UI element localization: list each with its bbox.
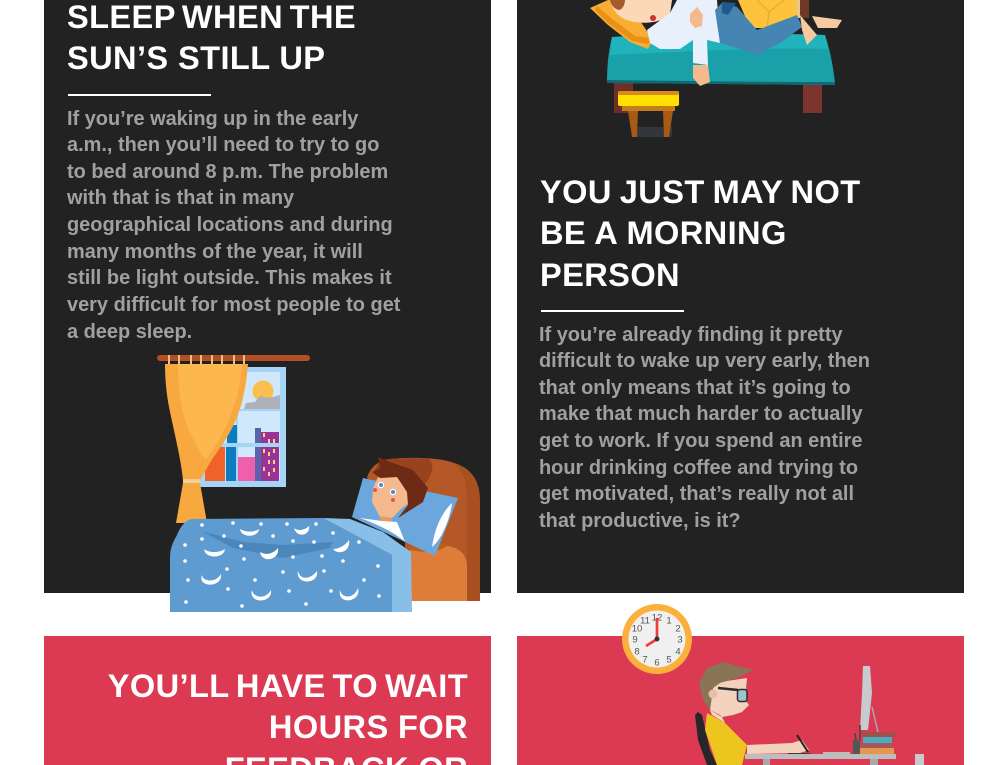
text: early sleep problem: very difficult for most people to get <box>67 294 400 316</box>
divider right <box>541 310 684 312</box>
text: waking up early difficulty: hour drinking coffee and trying to <box>539 457 858 479</box>
panel: sleep when the sun's still up <box>44 0 491 593</box>
text: early sleep problem <box>67 108 400 343</box>
text: waking up early difficulty: If you’re already finding it pretty <box>539 324 843 346</box>
illustration: wall clock <box>622 604 692 674</box>
text: early sleep problem: If you’re waking up in the early <box>67 108 358 130</box>
text: waking up early difficulty: make that much harder to actually <box>539 403 863 425</box>
text: waking up early difficulty: that only means that it’s going to <box>539 377 851 399</box>
illustration: wall clock: 9 <box>632 634 638 646</box>
divider left <box>68 94 211 96</box>
text: early sleep problem: still be light outside. This makes it <box>67 267 392 289</box>
illustration: man at desk <box>695 662 924 765</box>
illustration: wall clock: 11 <box>640 616 650 626</box>
heading: you'll have to wait hours for feedback: YOU’LL HAVE TO WAIT <box>108 667 468 704</box>
illustration: wall clock: 4 <box>675 646 681 658</box>
text: early sleep problem: a deep sleep. <box>67 321 192 343</box>
blanket stars <box>183 521 381 608</box>
illustration: wall clock: 5 <box>666 654 672 666</box>
heading: you'll have to wait hours for feedback <box>108 667 468 765</box>
heading: you'll have to wait hours for feedback: HOURS FOR <box>269 708 468 745</box>
text: early sleep problem: a.m., then you’ll need to try to go <box>67 134 379 156</box>
text: waking up early difficulty: get to work. If you spend an entire <box>539 430 862 452</box>
heading: you just may not be a morning person: BE A MORNING <box>540 214 787 251</box>
illustration: wall clock: 3 <box>677 634 683 646</box>
illustration: man sleeping on couch <box>590 0 842 137</box>
panel: not a morning person <box>517 0 964 593</box>
heading: sleep when the sun's still up <box>67 0 356 76</box>
illustration: window and curtain <box>157 355 310 523</box>
illustration: wall clock: 1 <box>666 616 672 626</box>
text: early sleep problem: many months of the year, it will <box>67 241 363 263</box>
illustration: wall clock: 12 <box>652 612 662 624</box>
blanket moons <box>201 526 358 600</box>
heading: sleep when the sun's still up: SUN’S STILL UP <box>67 39 325 76</box>
text: early sleep problem: geographical locations and during <box>67 214 393 236</box>
illustration: wall clock: 8 <box>634 646 640 658</box>
heading: you just may not be a morning person: PERSON <box>540 256 680 293</box>
illustration: boy in bed <box>170 457 480 612</box>
panel: wait for feedback <box>44 636 491 765</box>
illustration: wall clock: 6 <box>654 658 660 668</box>
heading: you just may not be a morning person <box>540 173 861 293</box>
text: waking up early difficulty: difficult to wake up very early, then <box>539 350 870 372</box>
panel: office worker <box>517 636 964 765</box>
text: early sleep problem: to bed around 8 p.m. The problem <box>67 161 388 183</box>
text: waking up early difficulty: get motivated, that’s really not all <box>539 483 854 505</box>
text: waking up early difficulty <box>539 324 870 532</box>
illustration: wall clock: 2 <box>675 624 681 634</box>
illustration: wall clock: 10 <box>632 624 642 634</box>
illustration: wall clock: 7 <box>642 654 648 666</box>
text: early sleep problem: with that is that in many <box>67 187 294 209</box>
heading: you just may not be a morning person: YOU JUST MAY NOT <box>540 173 861 210</box>
text: waking up early difficulty: that productive, is it? <box>539 510 741 532</box>
